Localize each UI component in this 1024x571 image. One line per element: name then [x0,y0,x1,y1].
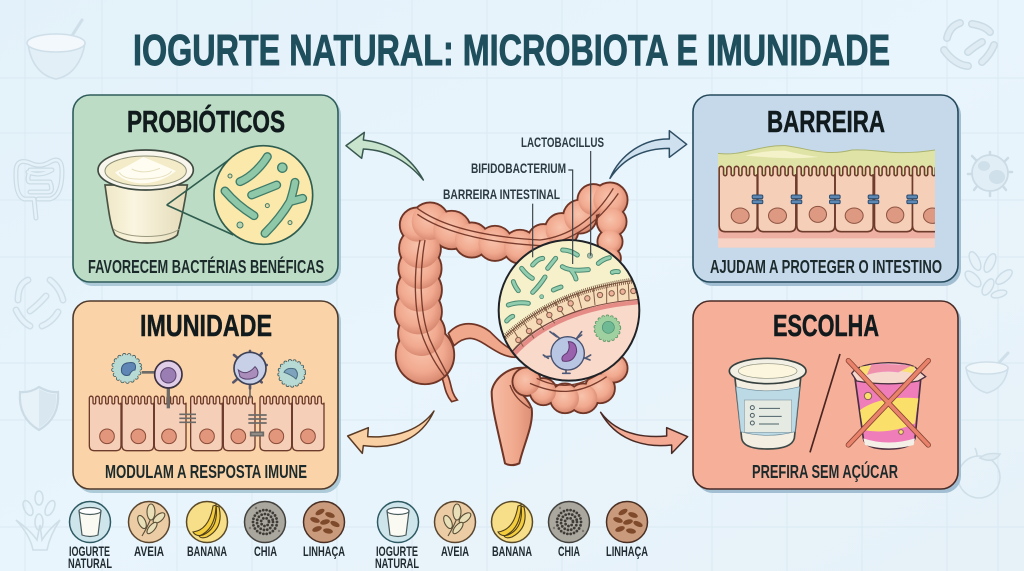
arrow: to imunidade [348,411,434,453]
heading: probióticos: PROBIÓTICOS [127,103,285,139]
caption: escolha: PREFIRA SEM AÇÚCAR [752,461,898,482]
icon: banana [186,502,228,542]
arrow: to probióticos [346,132,423,180]
illustration: yogurt cup and magnified bacteria [98,146,313,244]
illustration: immune cells over epithelium [89,351,324,451]
caption: barreira: AJUDAM A PROTEGER O INTESTINO [710,257,942,277]
icon: aveia 2 [434,502,476,542]
leader lines [533,151,591,264]
label: bifidobacterium: BIFIDOBACTERIUM [471,160,566,176]
panel: imunidade [73,301,341,493]
caption: imunidade: MODULAM A RESPOSTA IMUNE [105,462,307,482]
panel: barreira [693,95,961,286]
caption: probióticos: FAVORECEM BACTÉRIAS BENÉFICAS [88,256,324,277]
label: linhaça: LINHAÇA [303,543,345,559]
heading: barreira: BARREIRA [767,104,885,139]
icon: faint intestine left [16,160,62,218]
icon: faint fruit right [958,448,1000,498]
panel: probióticos [73,95,341,286]
label: aveia: AVEIA [134,543,164,559]
label: barreira intestinal: BARREIRA INTESTINAL [443,186,560,202]
arrow: to barreira [610,131,687,178]
icon: iogurte natural 2 [378,502,418,542]
icon: faint immune cell right [968,152,1012,196]
label: chia 2: CHIA [558,543,580,559]
illustration: large intestine with magnified lens [396,183,627,465]
icon: iogurte natural [70,502,110,542]
lens: magnified microbiota and barrier [498,239,640,382]
label: banana 2: BANANA [492,543,532,559]
label: iogurte natural 2 [375,543,419,571]
illustration: plain cup versus sugary cup [729,354,928,452]
label: chia: CHIA [254,543,277,559]
label: iogurte natural 2: NATURAL [375,555,419,571]
label: aveia 2: AVEIA [441,543,469,559]
icon: linhaça [304,502,344,542]
label: iogurte natural: NATURAL [68,555,112,571]
icon: linhaça 2 [606,502,648,542]
panel: escolha [693,301,961,493]
icon: chia [244,502,286,542]
food row [68,502,648,571]
heading: escolha: ESCOLHA [773,308,879,343]
heading: imunidade: IMUNIDADE [140,308,272,343]
icon: chia 2 [548,502,590,542]
arrow: to escolha [601,412,688,453]
icon: faint leaves right [962,250,1015,299]
label: linhaça 2: LINHAÇA [606,543,648,559]
icon: faint plant bottom left [16,491,60,550]
icon: faint bacteria top right [944,23,994,66]
icon: aveia [128,502,170,542]
label: banana: BANANA [187,543,227,559]
icon: faint bowl top left [27,20,85,79]
icon: faint bacteria left [16,280,63,326]
icon: banana 2 [492,502,532,542]
icon: faint bowl right [966,353,1008,393]
label: iogurte natural [68,543,112,571]
label: lactobacillus: LACTOBACILLUS [521,134,604,150]
icon: faint shield left [20,387,58,430]
illustration: epithelial barrier cells [718,145,935,248]
label: iogurte natural: IOGURTE [69,543,110,559]
label: iogurte natural 2: IOGURTE [376,543,418,559]
